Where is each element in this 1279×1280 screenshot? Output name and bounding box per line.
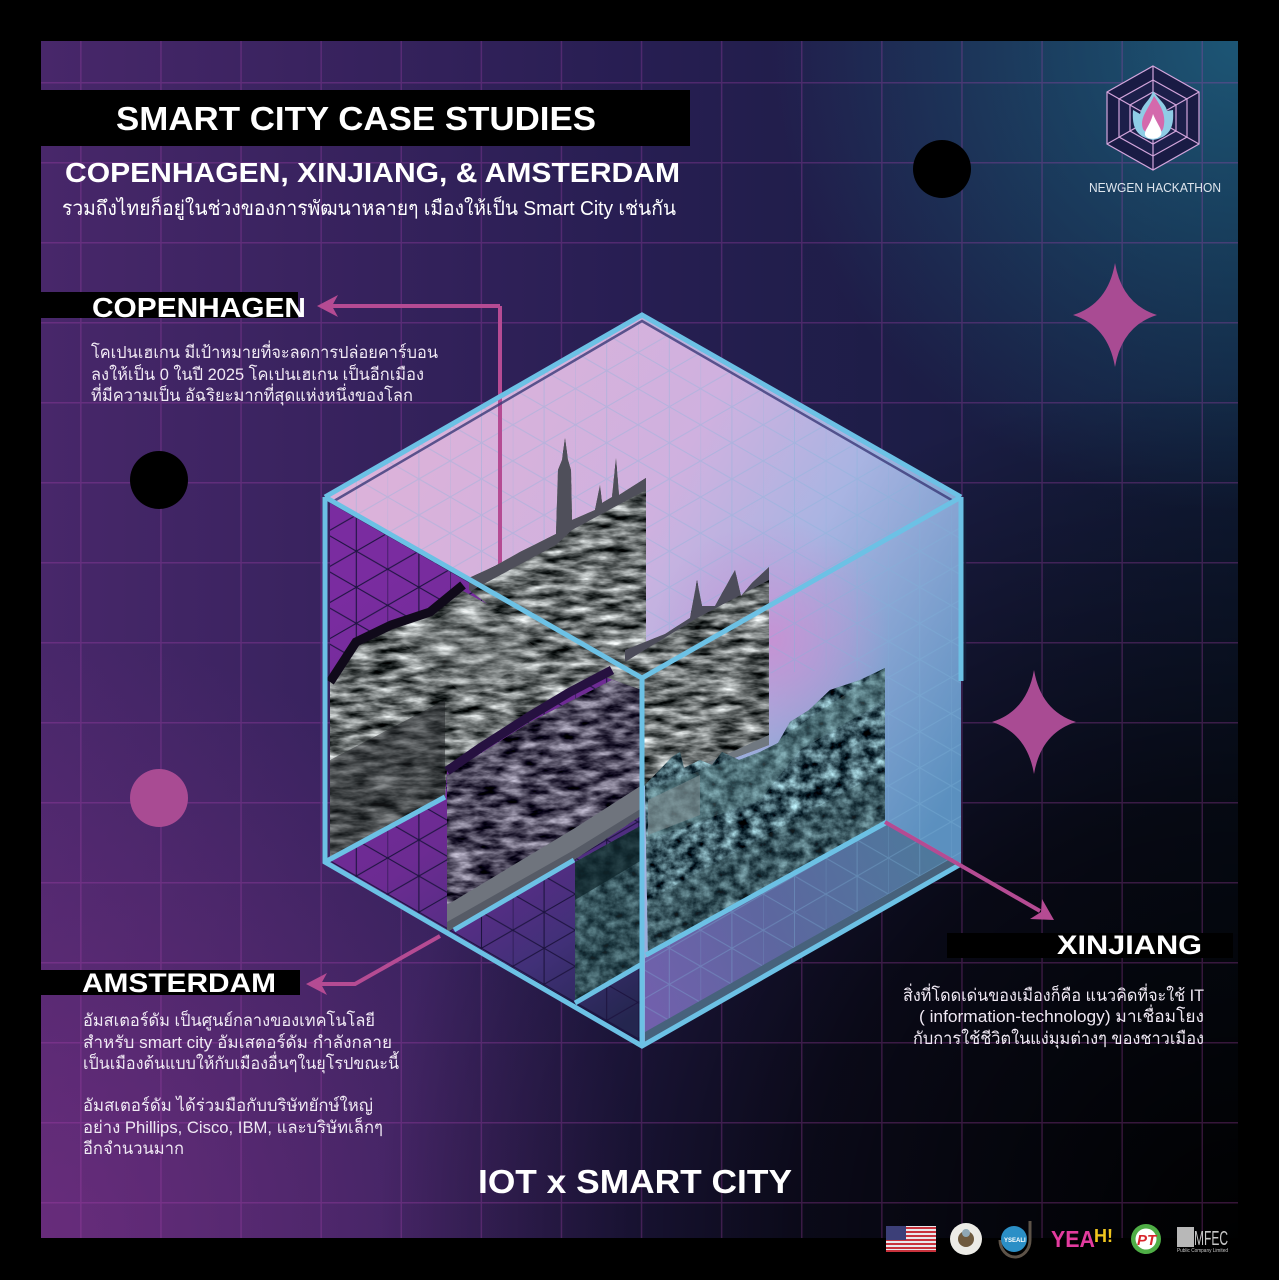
decorative circle: top (913, 140, 971, 198)
text: Copenhagen body (91, 340, 438, 406)
heading: Amsterdam: AMSTERDAM (82, 968, 276, 998)
logo: PT: PT (1137, 1232, 1158, 1249)
text: Copenhagen body: ลงให้เป็น 0 ในปี 2025 โคเปนเฮเกน เป็นอีกเมือง (91, 363, 424, 384)
footer title: IOT x SMART CITY (478, 1163, 792, 1200)
arrow stem inside cube (498, 306, 502, 575)
cube: dark inner edges (330, 321, 965, 1042)
logo: YSEALI (1000, 1221, 1030, 1257)
heading: Xinjiang (947, 930, 1233, 960)
decorative circle: left black (130, 451, 188, 509)
text: Amsterdam body: อย่าง Phillips, Cisco, IBM, และบริษัทเล็กๆ (83, 1116, 383, 1137)
text: Amsterdam body: สำหรับ smart city อัมเสตอร์ดัม กำลังกลาย (83, 1033, 392, 1052)
logo: PT (1131, 1224, 1161, 1254)
logo: embassy seal (950, 1223, 982, 1255)
arrow: to Xinjiang (885, 822, 1054, 920)
text: Amsterdam body: อัมสเตอร์ดัม เป็นศูนย์กลางของเทคโนโลยี (83, 1009, 375, 1031)
text: Copenhagen body: โคเปนเฮเกน มีเป้าหมายที่จะลดการปล่อยคาร์บอน (91, 340, 438, 362)
title bar: SMART CITY CASE STUDIES (116, 100, 596, 137)
sponsor logos (886, 1221, 1228, 1257)
heading: Xinjiang: XINJIANG (1057, 930, 1202, 960)
photo: building middle (625, 567, 769, 786)
text: Amsterdam body (83, 1009, 399, 1158)
arrow: to Copenhagen (317, 295, 500, 317)
logo: US flag (886, 1226, 936, 1252)
logo: MFEC: Public Company Limited (1177, 1248, 1228, 1254)
heading: Copenhagen: COPENHAGEN (92, 292, 306, 323)
decorative star: lower (992, 670, 1076, 774)
text: Xinjiang body: กับการใช้ชีวิตในแง่มุมต่างๆ ของชาวเมือง (913, 1028, 1204, 1049)
decorative star: upper (1073, 263, 1157, 367)
photo: Copenhagen front (330, 591, 602, 856)
logo: Yeah: YEA (1051, 1226, 1095, 1252)
cube: glass back wall (325, 315, 961, 1046)
logo: Yeah: H! (1094, 1226, 1113, 1246)
logo wordmark: NEWGEN HACKATHON (1089, 181, 1221, 195)
text: Xinjiang body: ( information-technology) มาเชื่อมโยง (919, 1004, 1204, 1026)
cube: purple left wall (330, 503, 642, 1042)
cube: blue frame (325, 315, 961, 1046)
cube: pink glow (650, 520, 890, 760)
subtitle: cities: COPENHAGEN, XINJIANG, & AMSTERDAM (65, 157, 680, 188)
subtitle: Thai: รวมถึงไทยก็อยู่ในช่วงของการพัฒนาหลายๆ เมืองให้เป็น Smart City เช่นกัน (62, 195, 676, 221)
photo: canal top shadow band (447, 670, 612, 771)
decorative circle: left pink (130, 769, 188, 827)
photo: Xinjiang skyline (640, 660, 890, 960)
text: Xinjiang body: สิ่งที่โดดเด่นของเมืองก็คือ แนวคิดที่จะใช้ IT (903, 983, 1204, 1005)
logo: MFEC (1177, 1227, 1228, 1254)
heading: Amsterdam (41, 968, 300, 998)
photo: Copenhagen rear (469, 438, 646, 684)
logo: YSEALI: YSEALI (1004, 1238, 1026, 1244)
cube: left wall grid (330, 503, 642, 1042)
title bar (41, 90, 690, 146)
photo: skyline shadow band (330, 585, 463, 682)
text: Xinjiang body (903, 983, 1204, 1049)
arrow: to Amsterdam (306, 936, 440, 995)
icon: flame (1133, 91, 1173, 140)
text: Amsterdam body: อีกจำนวนมาก (83, 1139, 184, 1158)
photo: dark towers (575, 826, 640, 1000)
illustration: isometric cube with city photos (325, 306, 965, 1046)
cube: right floor (645, 823, 961, 1046)
logo: Newgen Hackathon (1089, 66, 1221, 195)
text: Copenhagen body: ที่มีความเป็น อัฉริยะมากที่สุดแห่งหนึ่งของโลก (91, 383, 413, 406)
cube: floor bevel (645, 858, 958, 1042)
cube: light grid (325, 315, 961, 1046)
photo: Amsterdam canal (447, 680, 640, 931)
logo: MFEC: MFEC (1194, 1228, 1228, 1250)
text: Amsterdam body: เป็นเมืองต้นแบบให้กับเมืองอื่นๆในยุโรปขณะนี้ (83, 1051, 399, 1074)
text: Amsterdam body: อัมสเตอร์ดัม ได้ร่วมมือกับบริษัทยักษ์ใหญ่ (83, 1095, 373, 1115)
